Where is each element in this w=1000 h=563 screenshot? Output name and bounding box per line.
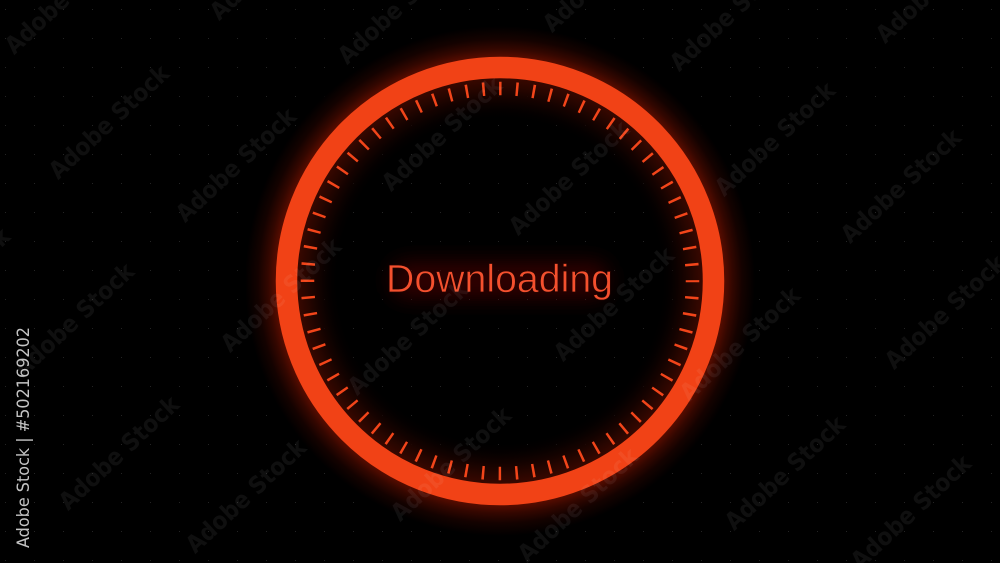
watermarks: Adobe Stock bbox=[170, 102, 303, 228]
watermarks: Adobe Stock bbox=[43, 59, 176, 185]
watermarks: Adobe Stock bbox=[215, 232, 348, 358]
progress ring bbox=[286, 68, 714, 494]
watermarks: Adobe Stock bbox=[709, 76, 842, 202]
watermarks: Adobe Stock bbox=[53, 390, 186, 516]
watermarks: Adobe Stock bbox=[376, 71, 509, 197]
watermarks: Adobe Stock bbox=[719, 410, 852, 536]
label: Downloading: Downloading bbox=[386, 258, 613, 301]
watermarks: Adobe Stock bbox=[8, 257, 141, 383]
watermarks: Adobe Stock bbox=[674, 281, 807, 407]
stock id caption: Adobe Stock | #502169202 bbox=[14, 327, 34, 548]
ring glow bbox=[245, 26, 755, 536]
tick marks bbox=[308, 88, 692, 474]
watermarks: Adobe Stock bbox=[180, 433, 313, 559]
watermarks: Adobe Stock bbox=[503, 115, 636, 241]
watermarks: Adobe Stock bbox=[342, 275, 475, 401]
watermarks: Adobe Stock bbox=[548, 241, 681, 367]
label glow bbox=[392, 262, 608, 298]
watermarks: Adobe Stock bbox=[835, 123, 968, 249]
watermarks: Adobe Stock bbox=[385, 401, 518, 527]
